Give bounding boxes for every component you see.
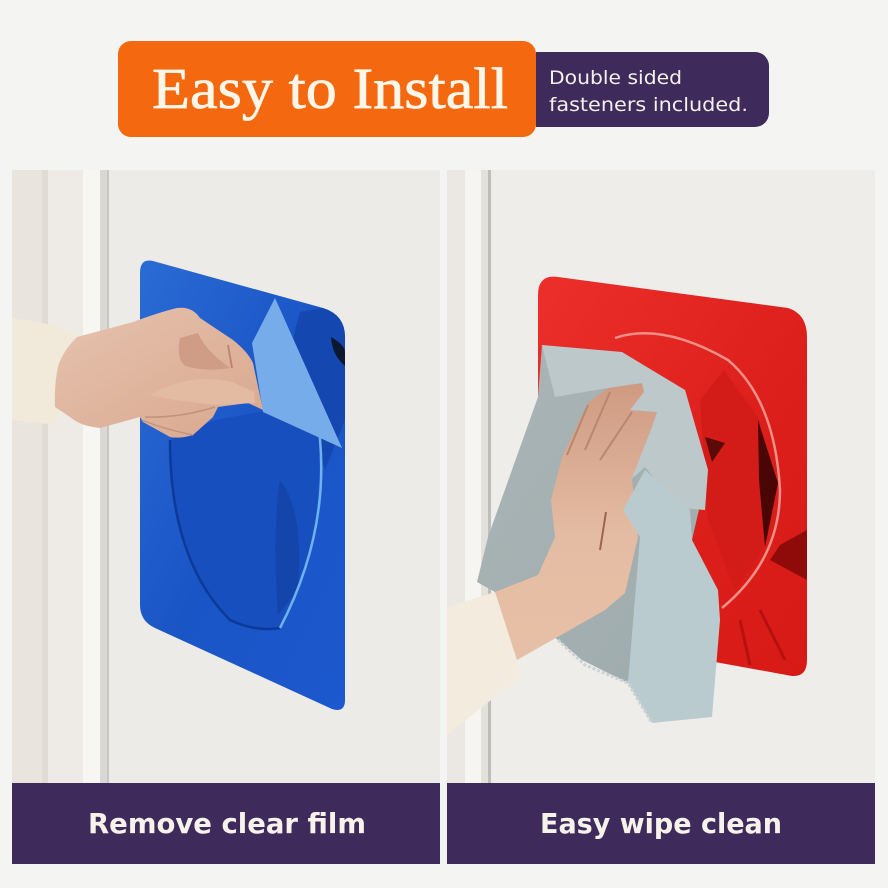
panel: easy wipe clean xyxy=(447,170,875,783)
header tag: fasteners: fasteners included. xyxy=(549,94,748,116)
caption bar: easy wipe clean: Easy wipe clean xyxy=(540,807,782,840)
sleeve xyxy=(12,318,78,425)
caption bar: easy wipe clean xyxy=(447,783,875,864)
cloth: back layer xyxy=(477,345,708,683)
clear film xyxy=(252,298,342,448)
header badge: Easy to Install xyxy=(118,41,536,137)
header tag: fasteners xyxy=(536,52,769,127)
cloth: front fold xyxy=(623,470,720,723)
caption bar: remove clear film xyxy=(12,783,440,864)
red mirror xyxy=(538,277,807,676)
panel: remove clear film xyxy=(12,170,440,783)
door frame xyxy=(447,170,491,783)
cloth: upper fold xyxy=(542,345,708,510)
caption bar: remove clear film: Remove clear film xyxy=(88,807,366,840)
header tag: fasteners: Double sided xyxy=(549,67,682,89)
door frame xyxy=(12,170,109,783)
cloth: frayed hem xyxy=(558,640,652,723)
blue mirror xyxy=(140,260,345,710)
wall xyxy=(447,170,875,783)
header badge: Easy to Install: Easy to Install xyxy=(152,56,508,121)
sleeve xyxy=(447,592,520,735)
hand: peeling film xyxy=(55,308,263,438)
wall xyxy=(12,170,440,783)
hand: wiping xyxy=(495,383,657,660)
